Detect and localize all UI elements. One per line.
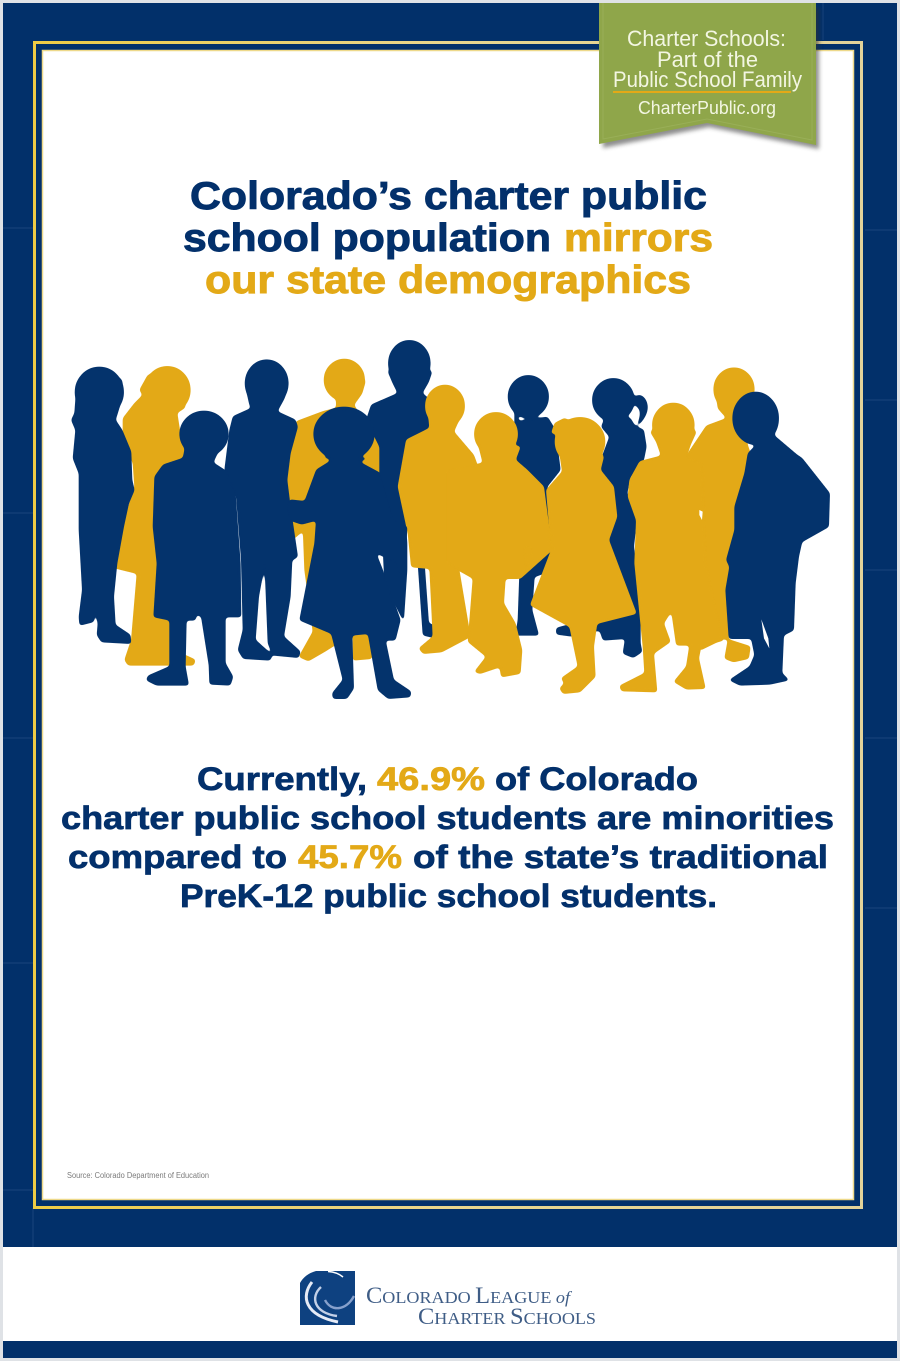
- statistic paragraph: 46.9%: [377, 761, 485, 797]
- statistic paragraph: [61, 761, 834, 914]
- silhouette: navy girl (back): [508, 376, 560, 635]
- silhouette: hand detail: [523, 547, 534, 567]
- silhouette: gold boy (centre back): [283, 359, 379, 661]
- ribbon heading: Part of the: [657, 47, 758, 72]
- silhouette: navy tall boy (centre back): [367, 341, 447, 640]
- ribbon website: CharterPublic.org: [638, 98, 776, 118]
- footer navy strip: [3, 1341, 897, 1358]
- title: school population: [183, 217, 551, 260]
- title: our state demographics: [205, 259, 691, 302]
- logo wordmark: COLORADO LEAGUE of: [366, 1283, 572, 1308]
- silhouette: gold ponytail girl: [447, 413, 552, 677]
- silhouette: gold boy (far right back): [673, 368, 754, 662]
- silhouette: white sliver between boys: [699, 510, 703, 520]
- statistic paragraph: charter public school students are minorities: [61, 800, 834, 836]
- silhouette: gold girl in dress with bow: [531, 418, 636, 693]
- statistic paragraph: of Colorado: [495, 761, 698, 797]
- ribbon gold underline: [613, 91, 791, 93]
- silhouette: navy ponytail girl (back): [557, 379, 647, 657]
- source note: Source: Colorado Department of Education: [67, 1171, 209, 1180]
- green ribbon banner: [599, 3, 819, 149]
- logo wordmark: CHARTER SCHOOLS: [418, 1304, 596, 1329]
- silhouettes of children: [72, 341, 829, 698]
- silhouette: navy girl (centre left): [225, 360, 300, 660]
- ribbon shadow: [603, 8, 819, 149]
- silhouette: gold boy in shorts (right): [620, 403, 723, 692]
- silhouette: white gap between navy boy's legs: [761, 619, 769, 648]
- statistic paragraph: compared to: [68, 839, 287, 875]
- logo mark: [300, 1271, 355, 1325]
- statistic paragraph: Currently,: [197, 761, 367, 797]
- silhouette: navy dress girl foreground: [287, 407, 411, 698]
- silhouette: navy boy foreground left: [147, 411, 241, 685]
- silhouette: gold boy with shorts (centre): [398, 385, 493, 653]
- gold double frame: [34, 42, 862, 1208]
- statistic paragraph: PreK-12 public school students.: [180, 878, 717, 914]
- ribbon heading: Charter Schools:: [627, 26, 786, 51]
- logo wordmark: [366, 1283, 596, 1329]
- ribbon shape: [599, 3, 816, 145]
- ribbon heading: [613, 26, 802, 92]
- silhouette: navy girl (far left): [72, 367, 134, 643]
- title: mirrors: [564, 217, 713, 260]
- title: Colorado’s charter public: [190, 175, 707, 218]
- statistic paragraph: of the state’s traditional: [413, 839, 828, 875]
- silhouette: gold girl (far left back): [110, 367, 195, 665]
- statistic paragraph: 45.7%: [298, 839, 402, 875]
- silhouette: navy boy with backpack: [726, 392, 829, 685]
- title: [183, 175, 713, 302]
- footer white band: [3, 1247, 897, 1341]
- logo: Colorado League of Charter Schools: [300, 1271, 596, 1329]
- ribbon heading: Public School Family: [613, 67, 802, 92]
